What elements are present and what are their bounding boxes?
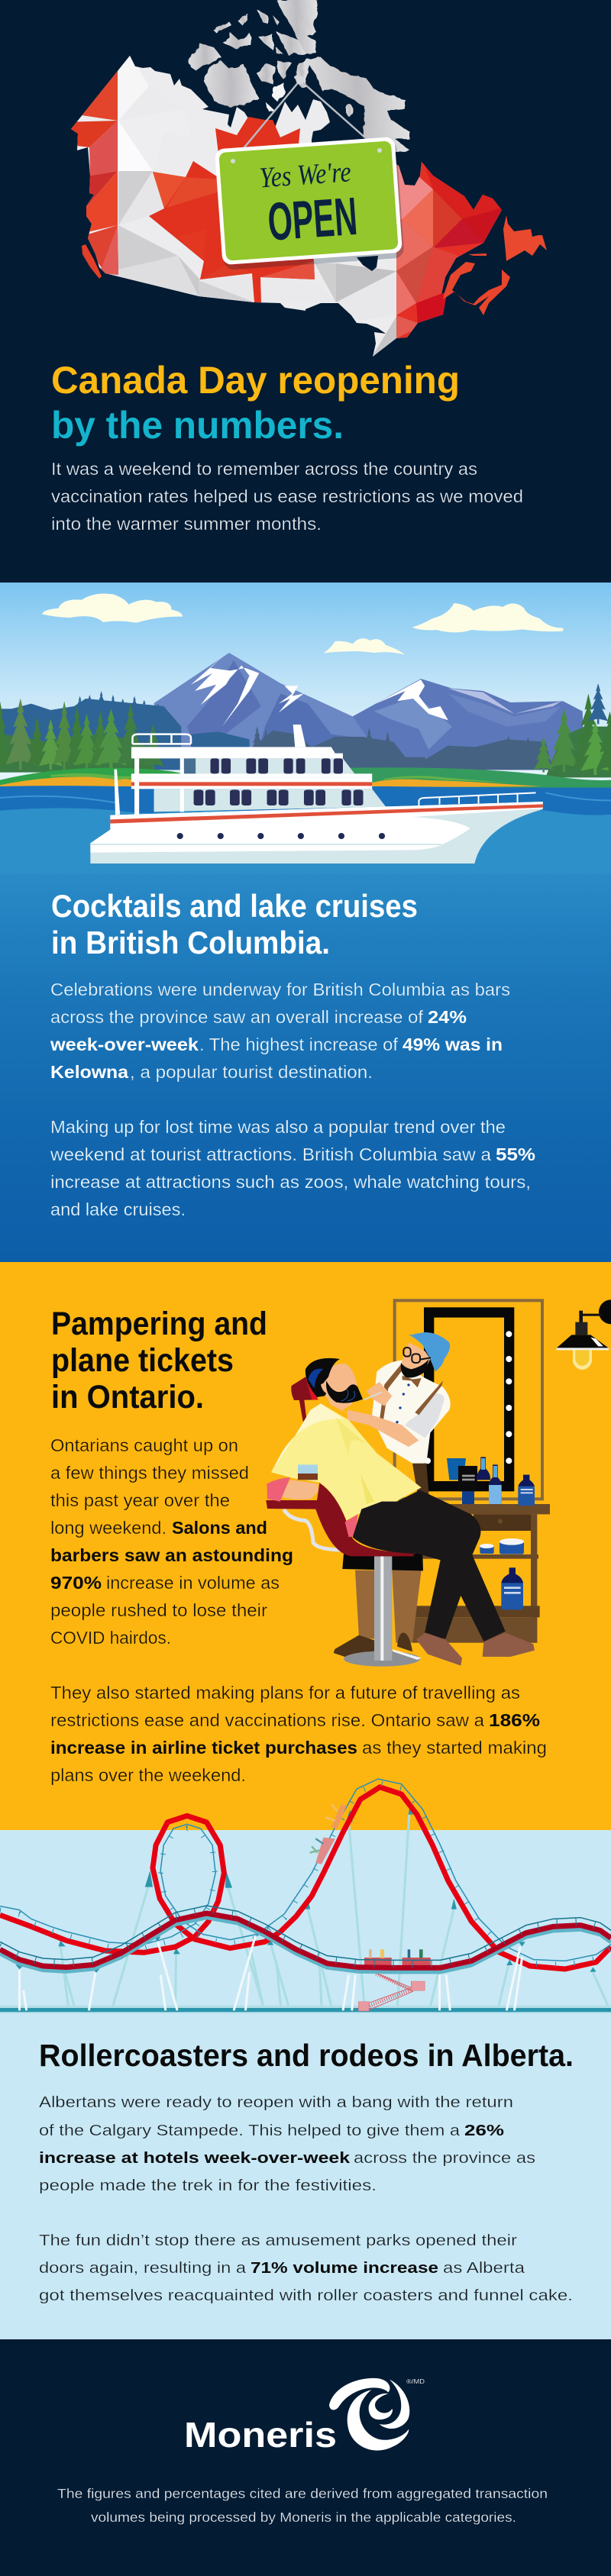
- heading: in Ontario.: [51, 1379, 204, 1416]
- stairs: [358, 1972, 425, 2011]
- mountains: [154, 653, 584, 770]
- body text: amusement parks: The fun didn’t stop there as amusement parks opened their: [39, 2232, 517, 2249]
- heading: Cocktails and lake cruises: [51, 888, 418, 924]
- chair seat: [266, 1483, 414, 1556]
- panel: intro: [51, 0, 547, 530]
- illustration: barber shop scene: [266, 1299, 611, 1667]
- body text: salons: long weekend.: [50, 1518, 166, 1538]
- heading: in British Columbia.: [51, 925, 330, 960]
- registered mark: ®/MD: [406, 2378, 425, 2385]
- body text: attractions: and lake cruises.: [50, 1199, 186, 1219]
- support brackets: [15, 1804, 596, 1973]
- sign script text: Yes We're: [258, 156, 352, 194]
- whisky glass: [298, 1464, 318, 1480]
- cruise boat: [90, 725, 543, 864]
- ground: [0, 2006, 611, 2013]
- heading: [51, 888, 418, 960]
- body text: salons: this past year over the: [50, 1490, 230, 1510]
- heading: Pampering and: [51, 1306, 267, 1342]
- body text: amusement parks: as Alberta: [443, 2259, 525, 2277]
- body text: amusement parks: [39, 2232, 573, 2304]
- body text: hotels: across the province as: [354, 2149, 535, 2167]
- upper cabin: [195, 758, 354, 773]
- portholes: [177, 833, 385, 839]
- left red bar: [71, 71, 118, 275]
- Moneris logo: Moneris: [184, 2415, 337, 2455]
- intro text: [51, 459, 523, 534]
- riders on the hill: [310, 1804, 347, 1864]
- body text: bars: across the province saw an overall increase of: [50, 1007, 424, 1027]
- chair pedestal: [344, 1556, 422, 1667]
- body text: airline tickets: [50, 1683, 547, 1785]
- clouds: [42, 594, 563, 655]
- Maritimes: [443, 262, 510, 315]
- disclaimer: The figures and percentages cited are derived from aggregated transaction: [57, 2486, 548, 2501]
- panel: British Columbia: [0, 583, 611, 1262]
- station cars with riders: [364, 1949, 431, 1967]
- body text: bars: Kelowna: [50, 1062, 128, 1082]
- mainland facets: [71, 56, 502, 357]
- distant forest: [74, 691, 250, 770]
- body text: salons: Salons and: [172, 1518, 267, 1538]
- body text: salons: a few things they missed: [50, 1463, 249, 1483]
- heading: Rollercoasters and rodeos in Alberta.: [39, 2038, 574, 2073]
- shoreline grass and sand: [0, 767, 611, 788]
- panel: footer: [0, 2339, 611, 2576]
- front track: [0, 1906, 611, 1972]
- hull: [90, 802, 543, 864]
- back hills: [0, 699, 181, 770]
- intro text: into the warmer summer months.: [51, 514, 322, 534]
- body text: attractions: 55%: [496, 1144, 535, 1164]
- body text: salons: increase in volume as: [106, 1573, 280, 1593]
- back supports: [60, 1815, 608, 2006]
- mirror: [395, 1300, 542, 1499]
- panel: Ontario: [0, 1262, 611, 1830]
- body text: salons: [50, 1435, 293, 1648]
- sign strings and pin: [233, 76, 380, 161]
- body text: airline tickets: as they started making: [362, 1738, 547, 1758]
- body text: bars: 24%: [428, 1007, 467, 1027]
- wall lamp: [556, 1299, 611, 1370]
- body text: amusement parks: 71% volume increase: [251, 2259, 438, 2277]
- head: [321, 1364, 357, 1415]
- illustration: rollercoaster: [0, 1779, 611, 2013]
- title: Canada Day reopening: [51, 359, 460, 402]
- chair back and headrest: [291, 1377, 318, 1422]
- lake: [0, 786, 611, 818]
- body text: bars: week-over-week: [50, 1035, 199, 1054]
- James Bay: [357, 256, 378, 271]
- Newfoundland: [503, 215, 547, 261]
- illustration: polygon map of Canada in flag colours: [61, 0, 547, 366]
- body text: salons: 970%: [50, 1573, 102, 1593]
- barber arm and hand: [348, 1410, 419, 1447]
- forest backdrop: [0, 727, 611, 777]
- grooming products: [447, 1457, 535, 1609]
- heading: plane tickets: [51, 1342, 234, 1379]
- windows: [194, 758, 364, 805]
- body text: airline tickets: They also started making plans for a future of travelling as: [50, 1683, 520, 1703]
- hanging sign: [215, 76, 404, 270]
- body text: hotels: Albertans were ready to reopen with a bang with the return: [39, 2093, 513, 2111]
- body text: salons: people rushed to lose their: [50, 1600, 267, 1620]
- body text: airline tickets: 186%: [489, 1710, 540, 1730]
- posts and rails: [114, 758, 184, 815]
- title: by the numbers.: [51, 404, 344, 447]
- body text: airline tickets: increase in airline ticket purchases: [50, 1738, 357, 1758]
- body text: hotels: 26%: [464, 2122, 504, 2139]
- body text: hotels: of the Calgary Stampede. This helped to give them a: [39, 2122, 461, 2139]
- evergreen trees: [0, 683, 611, 775]
- body text: hotels: increase at hotels week-over-week: [39, 2149, 351, 2167]
- heading: [51, 1306, 267, 1416]
- barber: [348, 1332, 451, 1464]
- Prince Edward Island: [468, 253, 487, 256]
- icon: Moneris swirl: [329, 2378, 409, 2451]
- trousers: [353, 1490, 506, 1641]
- back track with loop and hill: [0, 1779, 611, 1969]
- body text: bars: . The highest increase of: [199, 1035, 399, 1054]
- body text: attractions: Making up for lost time was also a popular trend over the: [50, 1117, 506, 1137]
- body text: salons: Ontarians caught up on: [50, 1435, 238, 1455]
- panel: Alberta: [0, 1779, 611, 2339]
- illustration: lake landscape with cruise boat: [0, 594, 611, 874]
- barber legs: [334, 1464, 429, 1658]
- white front supports: [20, 1937, 522, 2010]
- chair tube: [284, 1509, 344, 1550]
- title: [51, 359, 460, 447]
- vanity table: [412, 1504, 550, 1643]
- body text: attractions: increase at attractions such as zoos, whale watching tours,: [50, 1172, 531, 1192]
- body text: hotels: people made the trek in for the festivities.: [39, 2177, 377, 2194]
- Moneris logo: [184, 2378, 425, 2455]
- right red bar: [396, 162, 502, 338]
- body text: amusement parks: doors again, resulting in a: [39, 2259, 247, 2277]
- body text: salons: barbers saw an astounding: [50, 1545, 293, 1565]
- body text: bars: , a popular tourist destination.: [130, 1062, 373, 1082]
- body text: airline tickets: plans over the weekend.: [50, 1765, 246, 1785]
- body text: salons: COVID hairdos.: [50, 1628, 171, 1648]
- intro text: It was a weekend to remember across the country as: [51, 459, 477, 479]
- arctic islands: [189, 0, 410, 153]
- body text: hotels: [39, 2093, 535, 2194]
- body text: bars: 49% was in: [402, 1035, 503, 1054]
- client: [266, 1358, 535, 1666]
- body text: bars: Celebrations were underway for British Columbia as bars: [50, 980, 510, 999]
- disclaimer: volumes being processed by Moneris in the applicable categories.: [91, 2510, 516, 2525]
- Vancouver Island: [82, 244, 102, 279]
- intro text: vaccination rates helped us ease restrictions as we moved: [51, 486, 523, 506]
- body text: airline tickets: restrictions ease and vaccinations rise. Ontario saw a: [50, 1710, 485, 1730]
- body text: amusement parks: got themselves reacquainted with roller coasters and funnel cake.: [39, 2287, 573, 2304]
- body text: attractions: weekend at tourist attractions. British Columbia saw a: [50, 1144, 491, 1164]
- lower cabin: [154, 789, 386, 812]
- body text: attractions: [50, 1117, 535, 1219]
- sign OPEN text: OPEN: [266, 186, 359, 252]
- body text: bars: [50, 980, 510, 1082]
- maple leaf: [149, 117, 315, 302]
- disclaimer: [57, 2486, 548, 2525]
